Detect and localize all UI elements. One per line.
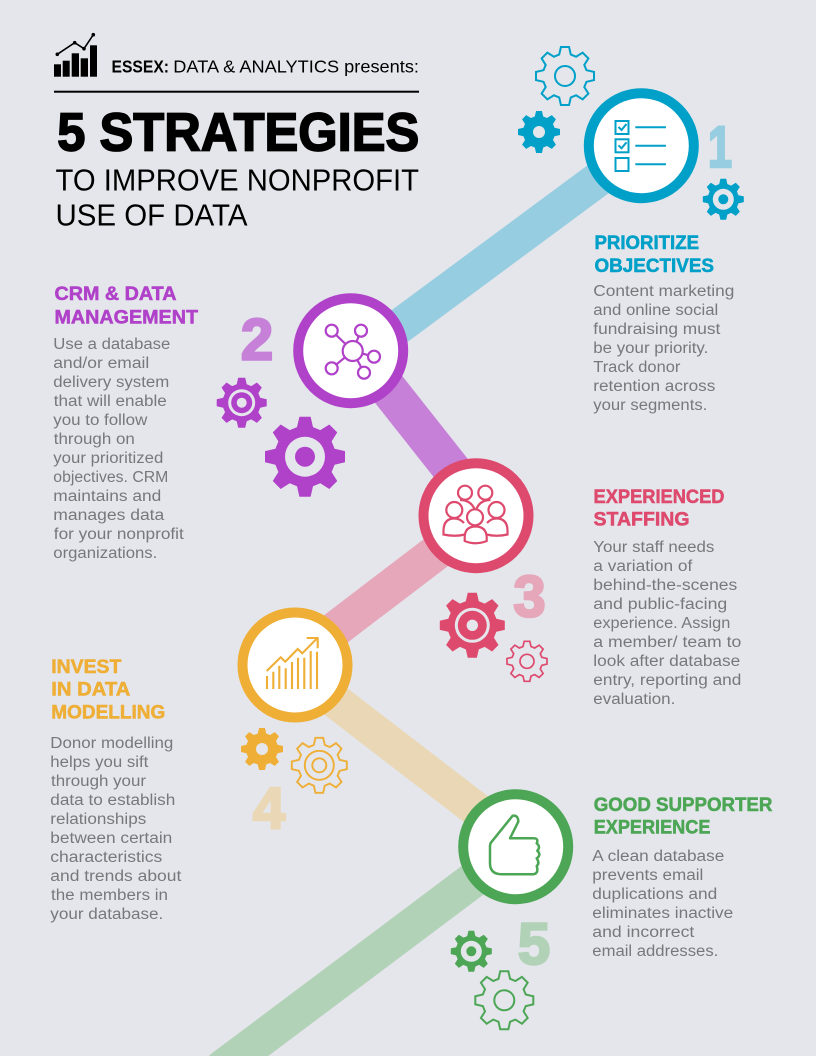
heading 5 (594, 794, 772, 839)
gear: solid (241, 728, 283, 770)
body text 4: Donor modelling (50, 735, 173, 752)
icon: thumbs up (490, 816, 539, 874)
heading 3 (594, 486, 724, 531)
body text 3: entry, reporting and (593, 672, 741, 689)
presenter line: DATA & ANALYTICS presents: (173, 57, 419, 77)
number 5: 5 (518, 912, 550, 977)
circle badge 4 (242, 612, 348, 718)
heading 4: MODELLING (51, 702, 165, 724)
heading 4: IN DATA (51, 679, 130, 701)
body text 2: and/or email (53, 355, 149, 372)
gear: outline (475, 971, 533, 1029)
body text 3: behind-the-scenes (593, 577, 738, 594)
body text 5: and incorrect (592, 924, 695, 941)
body text 4: helps you sift (50, 754, 149, 771)
title (56, 103, 419, 233)
icon: growth chart (267, 638, 318, 689)
body text 2: objectives. CRM (53, 469, 168, 486)
heading 1: OBJECTIVES (594, 255, 714, 277)
heading 3: EXPERIENCED (594, 486, 724, 508)
icon: group of people (444, 486, 508, 543)
body text 2: Use a database (53, 336, 170, 353)
body text 1: and online social (593, 302, 718, 319)
circle badge 3 (424, 463, 528, 568)
body text 4: your database. (50, 906, 163, 923)
gear: solid left (518, 111, 560, 153)
body text 2: delivery system (53, 374, 169, 391)
number 1: 1 (708, 115, 732, 180)
body text 5: prevents email (592, 867, 703, 884)
body text 4: data to establish (50, 792, 175, 809)
title: 5 STRATEGIES (57, 103, 419, 163)
body text 4: between certain (50, 830, 172, 847)
heading 2: MANAGEMENT (54, 306, 198, 328)
number 3: 3 (513, 565, 546, 630)
body text 1: Track donor (593, 359, 680, 376)
step 2: CRM and data management (53, 283, 403, 562)
body text 1: fundraising must (593, 321, 721, 338)
gear: ringed right (703, 179, 744, 220)
heading 3: STAFFING (594, 509, 690, 531)
gear: large ringed (265, 417, 345, 497)
body text 5: email addresses. (592, 943, 718, 960)
body text 2: maintains and (53, 488, 161, 505)
gear: large ringed (440, 593, 505, 658)
body text 3: evaluation. (593, 691, 675, 708)
heading 2: CRM & DATA (54, 283, 176, 305)
gear: outline ringed (292, 738, 347, 793)
heading 5: EXPERIENCE (594, 817, 710, 839)
path bands connecting the steps (220, 148, 641, 1056)
body text 5: duplications and (592, 886, 717, 903)
body text 2: manages data (53, 507, 165, 524)
body text 2: for your nonprofit (54, 526, 185, 543)
step 1: prioritize objectives (518, 47, 744, 414)
body text 3 (593, 539, 741, 708)
gear: outline small (507, 641, 547, 681)
step 5: good supporter experience (451, 794, 772, 1029)
circle badge 2 (298, 298, 403, 403)
body text 3: a member/ team to (593, 634, 741, 651)
icon: checklist (616, 121, 666, 171)
body text 1: be your priority. (593, 340, 708, 357)
body text 3: look after database (593, 653, 740, 670)
body text 1 (593, 283, 734, 414)
body text 1: retention across (593, 378, 716, 395)
body text 3: experience. Assign (593, 615, 730, 632)
gear: outline top (536, 47, 594, 105)
body text 5: eliminates inactive (592, 905, 733, 922)
body text 4: relationships (50, 811, 147, 828)
body text 1: Content marketing (593, 283, 734, 300)
body text 2: you to follow (53, 412, 148, 429)
body text 4 (50, 735, 182, 923)
body text 4: through your (51, 773, 146, 790)
body text 3: Your staff needs (593, 539, 715, 556)
body text 4: and trends about (50, 868, 182, 885)
heading 4 (51, 656, 165, 724)
circle badge 5 (463, 794, 568, 899)
header logo: bar chart icon (54, 33, 97, 77)
title: USE OF DATA (56, 198, 248, 233)
body text 3: a variation of (593, 558, 693, 575)
heading 2 (54, 283, 198, 328)
step 3: experienced staffing (424, 463, 741, 708)
gear: ringed (451, 931, 492, 972)
title: TO IMPROVE NONPROFIT (56, 163, 419, 198)
presenter line: ESSEX: (112, 57, 169, 77)
heading 5: GOOD SUPPORTER (594, 794, 772, 816)
gear: small ringed (217, 378, 267, 428)
body text 4: the members in (51, 887, 168, 904)
body text 5 (592, 848, 733, 960)
step 4: invest in data modelling (50, 612, 348, 923)
body text 2: organizations. (53, 545, 157, 562)
heading 1 (594, 232, 714, 277)
body text 1: your segments. (593, 397, 707, 414)
number 2: 2 (241, 307, 273, 372)
body text 2: your prioritized (53, 450, 163, 467)
body text 2: that will enable (54, 393, 167, 410)
heading 4: INVEST (51, 656, 121, 678)
heading 1: PRIORITIZE (594, 232, 699, 254)
body text 2: through on (54, 431, 135, 448)
body text 5: A clean database (592, 848, 724, 865)
body text 2 (53, 336, 185, 562)
icon: network (326, 325, 380, 379)
number 4: 4 (253, 776, 285, 841)
body text 3: and public-facing (593, 596, 727, 613)
circle badge 1 (589, 93, 694, 198)
body text 4: characteristics (50, 849, 163, 866)
